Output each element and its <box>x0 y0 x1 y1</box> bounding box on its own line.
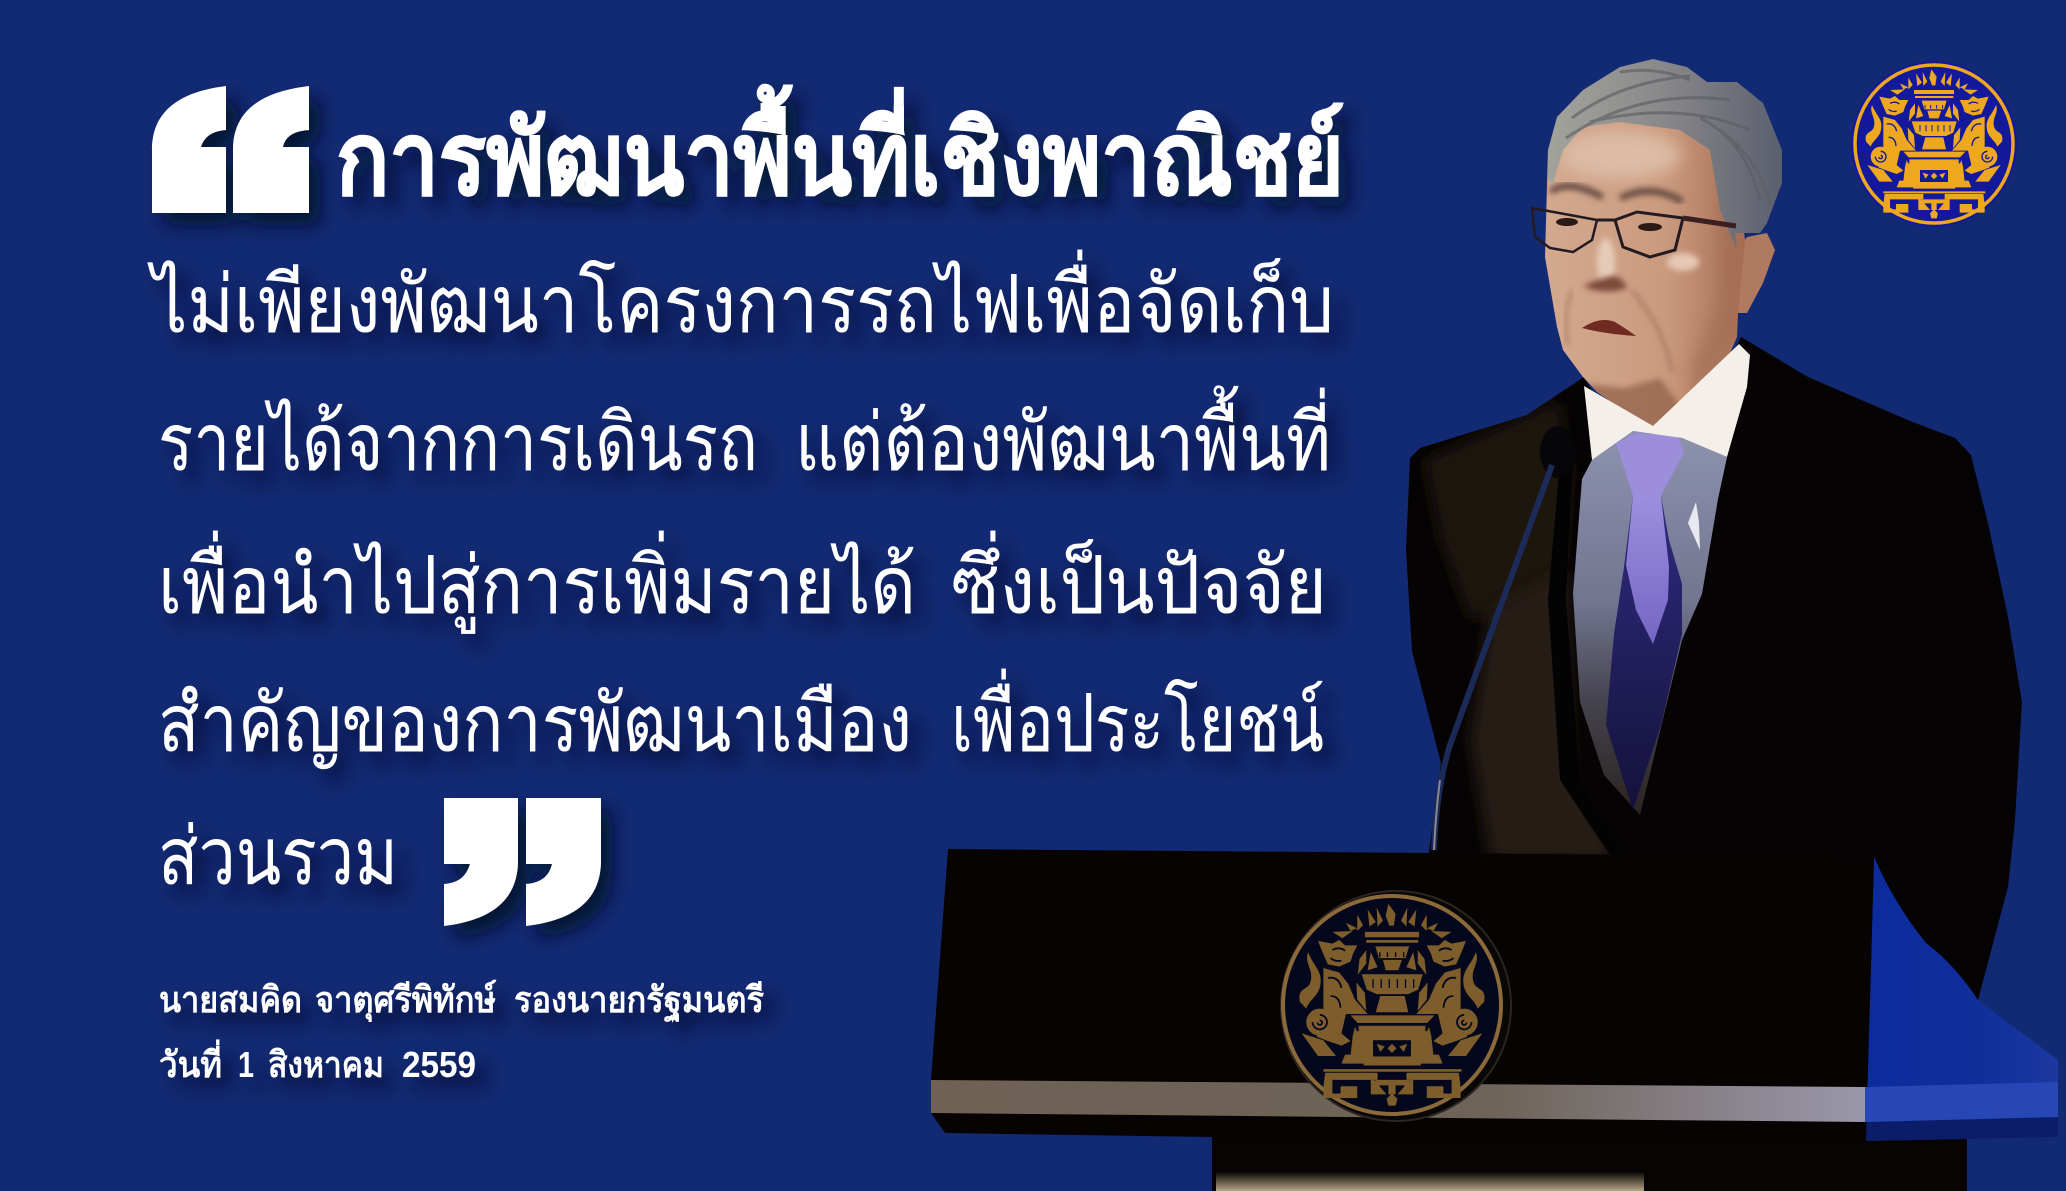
left chest <box>1424 400 1572 620</box>
shirt <box>1573 431 1727 815</box>
date: 1 <box>238 1044 254 1085</box>
podium stripe <box>931 1080 1865 1122</box>
hair <box>1548 59 1782 250</box>
left lower front <box>1470 570 1620 860</box>
face and neck <box>1545 100 1745 426</box>
closing quotation mark <box>444 798 601 926</box>
seal artwork <box>1866 69 2002 218</box>
tie <box>1606 433 1684 810</box>
quote line 3 <box>158 531 1327 634</box>
speaker name: นายสมคิด <box>159 979 302 1020</box>
hair strands <box>1566 70 1770 205</box>
glasses <box>1532 208 1736 257</box>
ear <box>1730 233 1775 313</box>
lapel pin <box>1688 502 1700 550</box>
quote text block <box>147 250 1334 901</box>
quote line 4: สำคัญของการพัฒนาเมือง <box>158 679 912 769</box>
nose and mouth <box>1582 276 1636 336</box>
eyebrows <box>1553 186 1680 200</box>
quote line 2: รายได้จากการเดินรถ <box>158 398 758 487</box>
collar <box>1584 344 1750 460</box>
face shading <box>1560 131 1745 430</box>
quote line 3: ซึ่งเป็นปัจจัย <box>951 531 1327 630</box>
speaker <box>1406 59 2022 1000</box>
quote line 2 <box>158 385 1331 487</box>
quote line 4: เพื่อประโยชน์ <box>951 669 1324 768</box>
title: การพัฒนาพื้นที่เชิงพาณิชย์ <box>336 84 1344 216</box>
date: สิงหาคม <box>268 1044 384 1085</box>
podium wing stripe <box>1865 1082 2058 1122</box>
podium seal artwork <box>1299 904 1485 1106</box>
speaker name <box>159 979 765 1023</box>
date: วันที่ <box>159 1039 222 1085</box>
quote line 1: ไม่เพียงพัฒนาโครงการรถไฟเพื่อจัดเก็บ <box>147 250 1334 349</box>
podium <box>931 849 2058 1191</box>
quote line 3: เพื่อนำไปสู่การเพิ่มรายได้ <box>158 531 916 634</box>
jacket shading <box>1424 402 1610 854</box>
date: 2559 <box>402 1044 476 1085</box>
eyes <box>1556 218 1662 231</box>
podium seal <box>1281 891 1511 1121</box>
speaker name: รองนายกรัฐมนตรี <box>514 979 765 1023</box>
quote line 5: ส่วนรวม <box>158 812 398 901</box>
quote line 4 <box>158 669 1324 769</box>
date <box>159 1039 476 1085</box>
tie knot <box>1616 433 1684 496</box>
podium wing lower band <box>1865 1117 2058 1141</box>
speaker name: จาตุศรีพิทักษ์ <box>315 979 497 1023</box>
podium front <box>931 849 1874 1141</box>
quote line 2: แต่ต้องพัฒนาพื้นที่ <box>795 385 1331 487</box>
pedestal highlight <box>1216 1172 1644 1191</box>
microphone <box>1434 426 1576 850</box>
jacket <box>1406 337 2022 1000</box>
attribution <box>159 979 765 1085</box>
opening quotation mark <box>152 86 309 213</box>
government seal logo <box>1851 61 2017 227</box>
podium side wing <box>1866 857 2058 1141</box>
pedestal <box>1212 1130 1967 1191</box>
lapel edge <box>1548 428 1620 854</box>
tie highlight <box>1626 496 1669 644</box>
